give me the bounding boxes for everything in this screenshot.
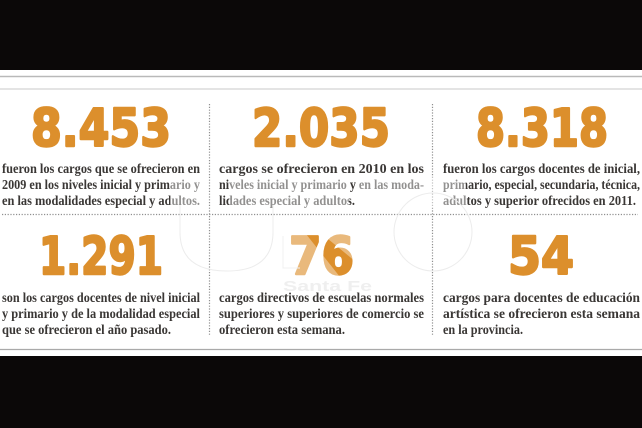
panel: 8.453 cargos in 2009 xyxy=(2,99,200,208)
text: directive positions description: superiores y superiores de comercio se xyxy=(219,306,424,321)
top black band xyxy=(0,0,642,70)
text: last year description: y primario y de la modalidad especial xyxy=(2,306,200,321)
text: 2011 description xyxy=(443,161,640,208)
text: last year description xyxy=(2,290,200,337)
panel: 1.291 cargos last year xyxy=(2,227,200,337)
text: 2009 description: fueron los cargos que se ofrecieron en xyxy=(2,161,200,176)
panel: 54 cargos this week xyxy=(443,227,640,337)
text: last year description: que se ofrecieron el año pasado. xyxy=(2,322,171,337)
text: artistic education description: artística se ofrecieron esta semana xyxy=(443,306,640,321)
panel: 2.035 cargos in 2010 xyxy=(219,99,424,208)
text: 2010 description: niveles inicial y primario y en las moda- xyxy=(219,177,424,192)
watermark: UNO Santa Fe: Santa Fe xyxy=(283,278,372,295)
text: 2010 description: cargos se ofrecieron en 2010 en los xyxy=(219,161,424,176)
panel: 76 cargos this week xyxy=(219,227,424,337)
text: directive positions description xyxy=(219,290,424,337)
text: 2010 description: lidades especial y adultos. xyxy=(219,193,355,208)
text: directive positions description: ofrecieron esta semana. xyxy=(219,322,345,337)
text: artistic education description: cargos para docentes de educación xyxy=(443,290,640,305)
watermark: UNO Santa Fe xyxy=(170,177,472,295)
bottom black band xyxy=(0,356,642,428)
number: 8.318: 8.318 xyxy=(476,99,608,159)
text: artistic education description xyxy=(443,290,640,337)
text: 2009 description xyxy=(2,161,200,208)
text: artistic education description: en la provincia. xyxy=(443,322,523,337)
panel: 8.318 cargos in 2011 xyxy=(443,99,640,208)
number: 1.291: 1.291 xyxy=(39,227,163,287)
text: 2010 description xyxy=(219,161,424,208)
text: directive positions description: cargos directivos de escuelas normales xyxy=(219,290,424,305)
text: last year description: son los cargos docentes de nivel inicial xyxy=(2,290,200,305)
text: 2009 description: 2009 en los niveles inicial y primario y xyxy=(2,177,200,192)
number: 2.035: 2.035 xyxy=(252,99,390,159)
text: 2009 description: en las modalidades especial y adultos. xyxy=(2,193,200,208)
number: 54: 54 xyxy=(508,227,574,287)
number: 76: 76 xyxy=(289,227,354,287)
number: 8.453: 8.453 xyxy=(31,99,171,159)
